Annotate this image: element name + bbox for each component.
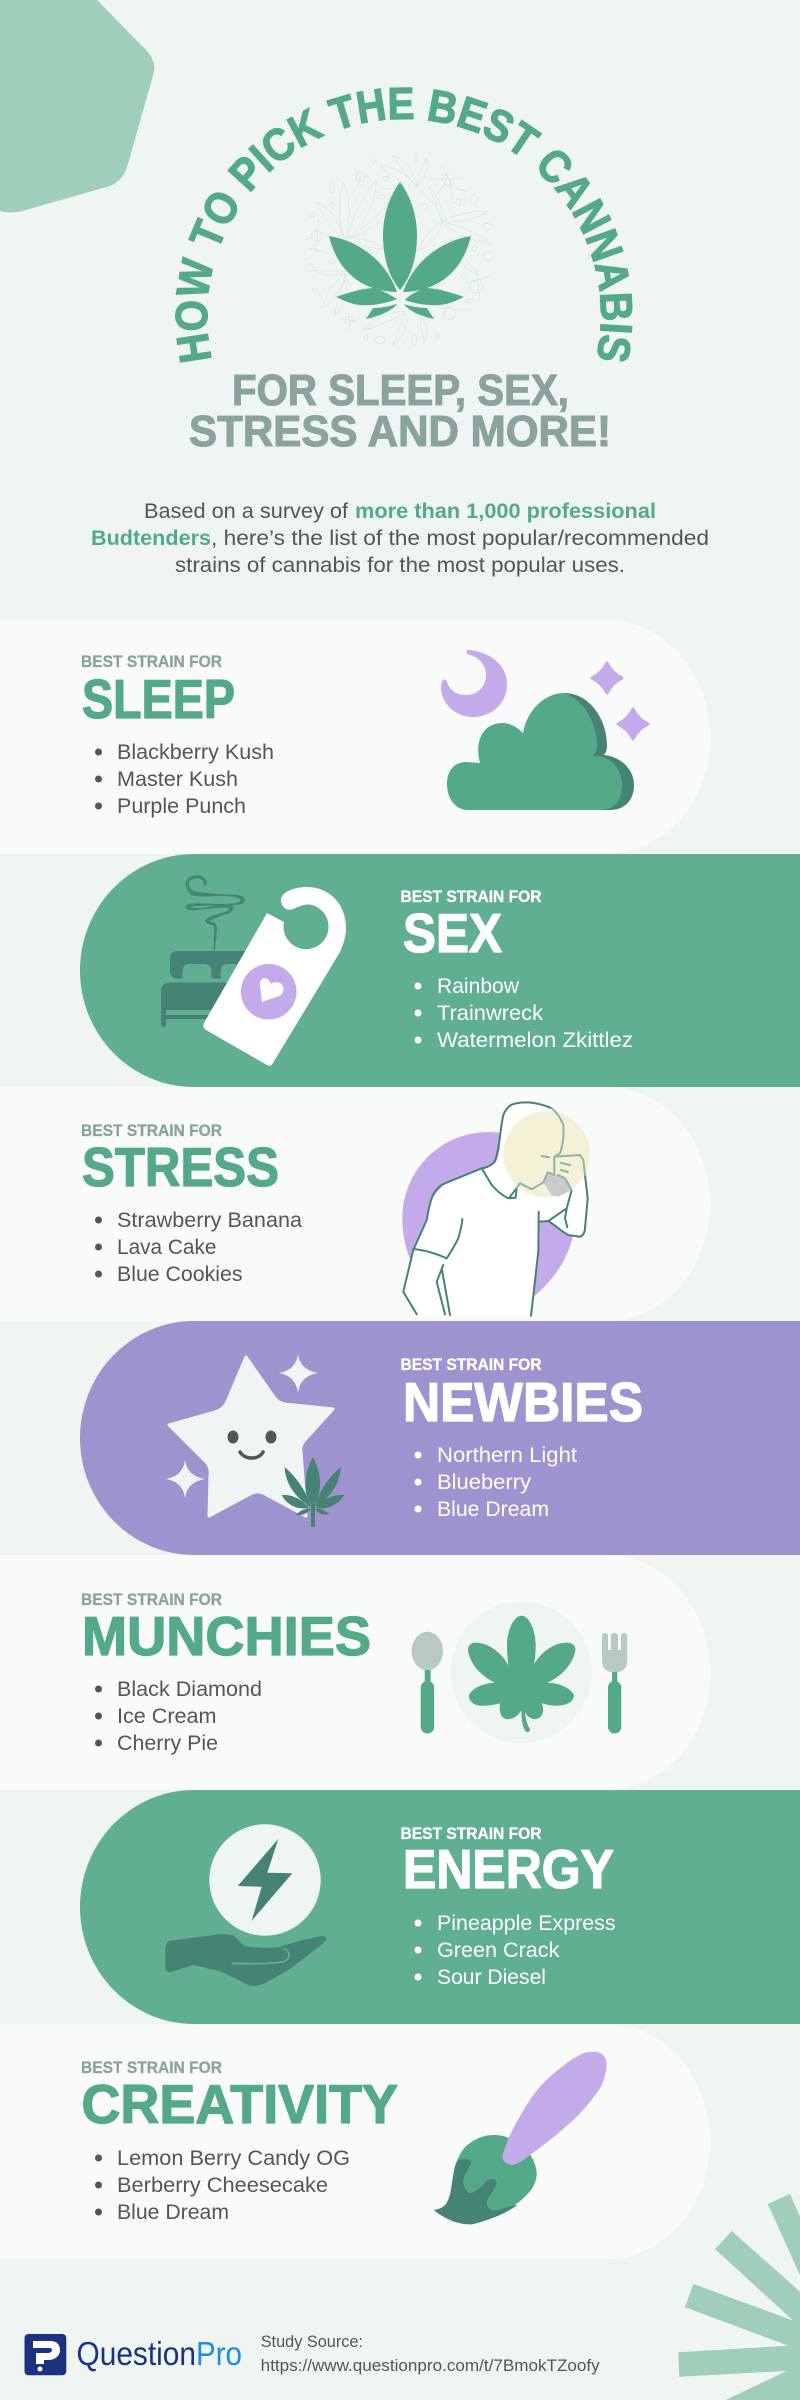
list: stress strains: Lava Cake [117,1236,216,1259]
list: sleep strains [95,741,274,818]
list: energy strains: Sour Diesel [437,1966,546,1989]
icon: hand holding lightning bolt [165,1824,326,1986]
study source text [261,2332,600,2375]
list: munchies strains: Black Diamond [117,1678,262,1701]
heading: stress: STRESS [82,1136,279,1198]
label: best strain for energy: BEST STRAIN FOR [400,1824,542,1843]
intro text block: strains of cannabis for the most popular uses. [175,554,625,577]
list: munchies strains: Ice Cream [117,1705,216,1728]
subtitle: FOR SLEEP, SEX, [232,366,569,415]
list: energy strains [414,1912,616,1989]
icon: bed, smoke and door hanger [161,876,346,1066]
list: newbies strains: Northern Light [437,1444,577,1467]
icon: smiling star with leaf [166,1354,344,1527]
intro text block: more than 1,000 professional [355,500,656,523]
label: best strain for sleep: BEST STRAIN FOR [81,652,222,671]
list: creativity strains: Lemon Berry Candy OG [117,2147,350,2170]
label: best strain for creativity: BEST STRAIN FOR [81,2058,222,2077]
label: best strain for stress: BEST STRAIN FOR [81,1121,222,1140]
icon: moon, stars and cloud [441,650,648,810]
list: newbies strains: Blueberry [437,1471,532,1494]
list: stress strains [95,1209,302,1286]
list: sleep strains: Master Kush [117,768,238,791]
icon: paint brush [434,2052,607,2224]
list: stress strains: Strawberry Banana [117,1209,302,1232]
intro text block: , here’s the list of the most popular/recommended [211,527,709,550]
list: stress strains: Blue Cookies [117,1263,242,1286]
panel: newbies [80,1321,800,1555]
icon: cannabis leaf [329,182,471,319]
panel: stress [0,1087,710,1321]
list: energy strains: Pineapple Express [437,1912,616,1935]
icon: plate with leaf, spoon and fork [412,1602,627,1743]
study source text: https://www.questionpro.com/t/7BmokTZoofy [261,2356,600,2375]
panel: sex [80,854,800,1087]
heading: newbies: NEWBIES [403,1371,643,1433]
subtitle [189,366,611,456]
list: sex strains: Trainwreck [437,1002,544,1025]
intro text block: Based on a survey of [144,500,348,523]
decorative hexagon top left [0,0,154,212]
panel: energy [80,1790,800,2024]
logo: QuestionPro [24,2334,242,2375]
logo: QuestionPro: Question [76,2335,196,2372]
decorative burst bottom right [678,2194,800,2400]
list: sex strains: Rainbow [437,975,520,998]
study source text: Study Source: [261,2332,363,2351]
list: sleep strains: Blackberry Kush [117,741,274,764]
heading: sex: SEX [403,902,502,964]
intro text block: Budtenders [91,527,211,550]
subtitle: STRESS AND MORE! [189,407,611,456]
list: sleep strains: Purple Punch [117,795,246,818]
list: creativity strains: Berberry Cheesecake [117,2174,328,2197]
icon: stressed person [402,1102,590,1316]
heading: sleep: SLEEP [82,668,235,730]
list: newbies strains [414,1444,577,1521]
logo: QuestionPro: Pro [196,2335,242,2372]
list: munchies strains [95,1678,262,1755]
panel: sleep [0,620,710,854]
list: sex strains [414,975,633,1052]
heading: creativity: CREATIVITY [82,2073,398,2135]
panel: munchies [0,1555,710,1790]
list: newbies strains: Blue Dream [437,1498,549,1521]
icon: sketched botanical background [306,155,493,345]
label: best strain for munchies: BEST STRAIN FOR [81,1590,222,1609]
heading: energy: ENERGY [403,1838,614,1900]
list: energy strains: Green Crack [437,1939,560,1962]
panel: creativity [0,2024,710,2259]
label: best strain for sex: BEST STRAIN FOR [400,887,542,906]
title: curved heading: HOW TO PICK THE BEST CANNABIS [175,87,632,363]
list: sex strains: Watermelon Zkittlez [437,1029,633,1052]
label: best strain for newbies: BEST STRAIN FOR [400,1355,542,1374]
list: creativity strains [95,2147,350,2224]
list: creativity strains: Blue Dream [117,2201,229,2224]
heading: munchies: MUNCHIES [82,1605,371,1667]
intro text block [91,500,709,577]
list: munchies strains: Cherry Pie [117,1732,218,1755]
